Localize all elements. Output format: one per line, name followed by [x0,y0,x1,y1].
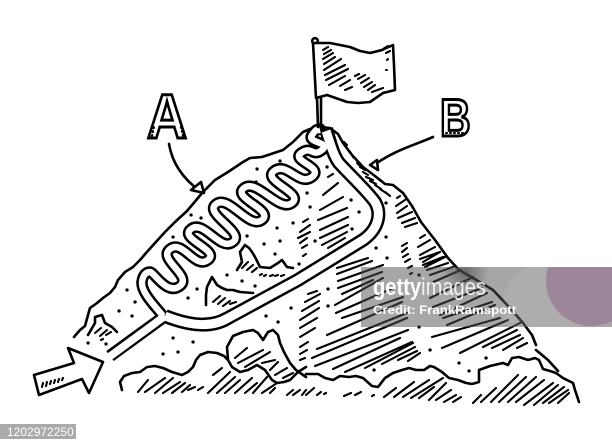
flag on summit [312,38,395,127]
letter A: A [147,81,187,152]
shrub upper [237,245,293,276]
mountain outline [74,127,558,371]
cloud left [120,330,306,395]
letter B: B [440,90,471,148]
watermark band [361,267,612,327]
dots on slopes [88,161,486,371]
gettyimages wordmark: gettyimages [373,274,486,301]
credit text: Credit: FrankRamspott [373,303,516,317]
cloud right [306,357,579,405]
winding road A [105,129,378,360]
mountain hatching [298,174,527,372]
arrow to path A [169,144,204,193]
shrub middle [206,277,253,306]
image id label: 1202972250 [7,425,74,439]
shrub lower left [88,315,117,340]
ridge ticks on path B [344,142,390,196]
arrow to path B [370,137,433,170]
start arrow [34,348,103,395]
